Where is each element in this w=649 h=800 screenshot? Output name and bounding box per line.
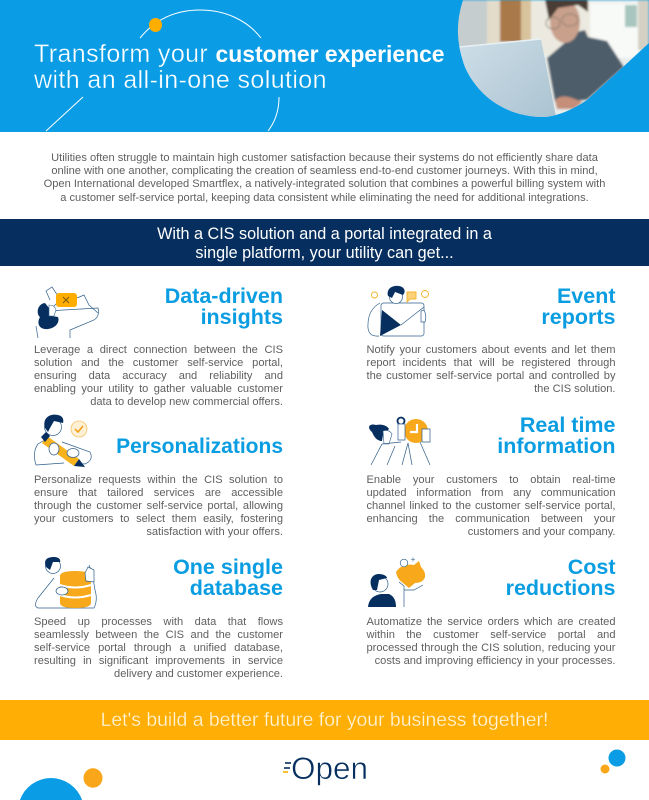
body text: solution and the customer self-service portal, [34,357,283,369]
sweater [547,30,624,102]
intro paragraph: a customer self-service portal, keeping data consistent while eliminating the need for additional integrations. [60,192,589,204]
body text: ensure that tailored services are accessible [34,486,283,498]
icon: person with piggy bank [368,558,426,607]
body text: data to develop new commercial offers. [90,396,283,408]
body text: the CIS solution. [534,383,616,395]
heading: Data-driven [165,284,283,308]
heading: reports [541,305,616,329]
body text: Automatize the service orders which are created [366,616,616,628]
body text [366,344,616,395]
body text: ensuring data accuracy and reliability and [34,370,283,382]
navy subheading band: single platform, your utility can get... [195,244,454,262]
face [550,1,580,43]
decorative arcs and orange dot [46,10,280,132]
body text: enhancing the communication between your [366,512,616,524]
heading: database [190,576,283,600]
intro paragraph: Utilities often struggle to maintain high customer satisfaction because their systems do not efficiently share data [51,152,598,164]
body text: channel linked to the customer self-service portal, [366,500,616,512]
panel: one single database [34,555,283,680]
body text: customers and your company. [468,526,616,538]
body text: updated information from any communication [366,486,616,498]
body text: costs and improving efficiency in your processes. [375,654,616,666]
heading [541,284,616,329]
body text: processed through the CIS solution, reducing your [366,642,616,654]
decorative circles: bottom left [20,768,102,800]
title [34,40,445,94]
icon: person holding data card [36,286,99,338]
header banner [0,0,649,132]
icon: woman holding clock [369,416,430,466]
icon: man hugging database [35,557,97,608]
glasses [546,14,578,29]
header photo: woman at laptop [458,0,649,117]
panel: cost reductions [366,555,616,666]
body text: self-service portal through a unified database, [34,642,283,654]
body text: the customer self-service portal and controlled by [366,370,616,382]
heading: information [497,434,616,458]
title: Transform your customer experience [34,40,445,68]
panel: real time information [366,412,616,538]
body text: Notify your customers about events and let them [366,344,616,356]
body text: within the customer self-service portal and [366,628,616,640]
laptop [460,40,556,117]
body text: your customers to select them easily, fostering [34,512,283,524]
call to action band [0,700,649,740]
intro paragraph: Open International developed Smartflex, a natively-integrated solution that combines a powerful billing system with [44,178,605,190]
heading [506,555,616,600]
body text: Leverage a direct connection between the CIS [34,344,283,356]
heading: One single [173,555,283,579]
heading: Personalizations [116,435,283,458]
heading: Real time [520,412,616,436]
intro paragraph: online with one another, complicating the creation of seamless end-to-end customer journeys. With this in mind, [51,165,598,177]
intro paragraph [44,152,605,204]
heading [165,284,283,329]
heading [497,412,616,458]
body text [34,616,283,680]
icon: man hugging pencil [34,414,92,467]
hands [555,96,583,109]
body text: satisfaction with your offers. [146,526,283,538]
heading: Event [557,284,616,308]
body text: enabling your utility to gather valuable customer [34,383,283,395]
body text: seamlessly between the CIS and the customer [34,628,283,640]
body text: Enable your customers to obtain real-time [366,474,616,486]
body text [366,474,616,538]
heading [173,555,283,600]
body text [34,344,283,408]
body text [366,616,616,666]
body text: Speed up processes with data that flows [34,616,283,628]
panel: event reports [366,284,616,395]
body text [34,474,283,538]
panel: data-driven insights [34,284,283,408]
title: with an all-in-one solution [34,66,327,94]
decorative circles: bottom right [600,750,626,774]
panel: personalizations [34,414,283,538]
heading: insights [201,305,283,329]
heading: reductions [506,576,616,600]
heading: Cost [568,555,616,579]
body text: through the customer self-service portal, allowing [34,500,283,512]
body text: Personalize requests within the CIS solution to [34,474,283,486]
navy subheading band: With a CIS solution and a portal integrated in a [157,224,492,242]
body text: report incidents that will be registered through [366,357,616,369]
navy subheading band [0,219,649,266]
call to action band: Let's build a better future for your business together! [101,709,548,731]
body text: delivery and customer experience. [114,668,283,680]
body text: resulting in significant improvements in service [34,654,283,666]
icon: man holding envelope [368,286,429,336]
